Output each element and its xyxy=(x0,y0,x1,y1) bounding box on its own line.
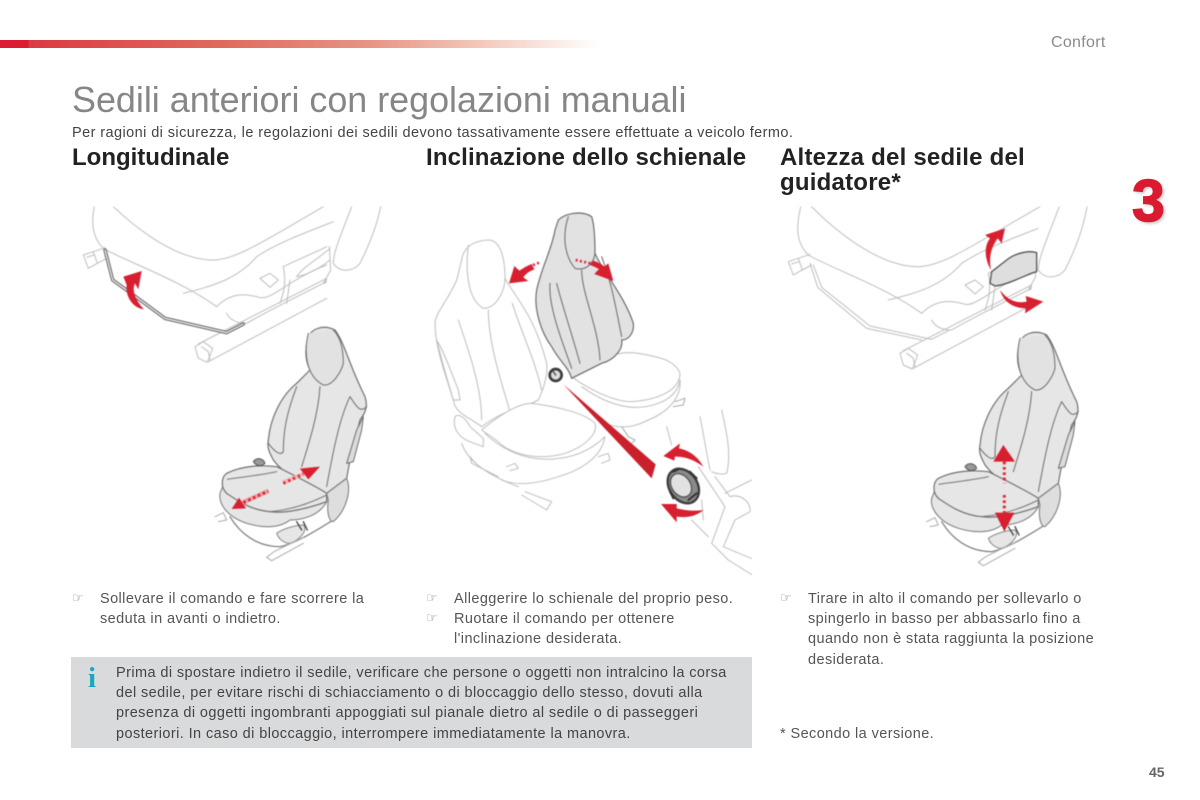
red zoom beam xyxy=(563,384,656,478)
arrow: rotate up xyxy=(663,443,703,467)
heading: Altezza del sedile del guidatore: Altezza del sedile del xyxy=(780,144,1025,171)
panel: longitudinale illustrations xyxy=(83,190,383,561)
height lever xyxy=(990,252,1037,286)
instruction text: Tirare in alto il comando per sollevarlo o xyxy=(808,591,1082,607)
small adjustment knob xyxy=(550,369,562,381)
seat with height arrows xyxy=(927,332,1078,566)
instruction column 3 xyxy=(780,591,1094,668)
instruction text: seduta in avanti o indietro. xyxy=(100,611,281,627)
instruction text 2 xyxy=(454,611,675,647)
heading: Inclinazione dello schienale: Inclinazione dello schienale xyxy=(426,144,746,171)
heading: Longitudinale: Longitudinale xyxy=(72,144,229,171)
instruction text: quando non è stata raggiunta la posizione xyxy=(808,631,1094,647)
rail detail xyxy=(788,197,1088,369)
chapter number: 3 xyxy=(1132,168,1165,234)
arrow: recline forward xyxy=(509,262,540,283)
instruction text: desiderata. xyxy=(808,652,884,668)
callout text: posteriori. In caso di bloccaggio, interrompere immediatamente la manovra. xyxy=(116,726,631,742)
seat with longitudinal arrows xyxy=(215,327,367,561)
title: Sedili anteriori con regolazioni manuali xyxy=(72,80,686,120)
instruction text 1: Alleggerire lo schienale del proprio peso. xyxy=(454,591,733,607)
knob detail xyxy=(661,410,755,577)
instruction text 2: l'inclinazione desiderata. xyxy=(454,631,622,647)
instruction text: Sollevare il comando e fare scorrere la xyxy=(100,591,364,607)
callout text: presenza di oggetti ingombranti appoggiati sul pianale dietro al sedile o di passeggeri xyxy=(116,705,698,721)
front seat outline xyxy=(435,240,610,510)
rail detail with lever xyxy=(83,190,383,362)
arrow: recline backward xyxy=(576,260,613,281)
header gradient bar xyxy=(0,40,600,48)
instruction text xyxy=(100,591,364,627)
pointer bullet 1: ☞ xyxy=(426,591,438,606)
rear seat with highlighted backrest xyxy=(536,213,685,443)
pointer bullet: ☞ xyxy=(780,591,792,606)
panel: inclinazione illustrations xyxy=(435,213,755,577)
heading: Altezza del sedile del guidatore: guidatore* xyxy=(780,169,901,196)
instruction column 1 xyxy=(72,591,364,627)
instruction text: spingerlo in basso per abbassarlo fino a xyxy=(808,611,1081,627)
panel: altezza illustrations xyxy=(788,197,1088,566)
pointer bullet 2: ☞ xyxy=(426,611,438,626)
callout text xyxy=(116,665,727,742)
instruction column 2 xyxy=(426,591,733,647)
section label: Confort: Confort xyxy=(1051,34,1106,51)
arrow: pull lever up xyxy=(985,228,1005,270)
page number: 45 xyxy=(1149,764,1165,780)
illustrations xyxy=(82,206,1088,576)
icon: info: i xyxy=(88,662,96,694)
callout text: Prima di spostare indietro il sedile, verificare che persone o oggetti non intralcino la corsa xyxy=(116,665,727,681)
pointer bullet: ☞ xyxy=(72,591,84,606)
arrow: lift lever xyxy=(123,271,144,309)
callout: info box xyxy=(71,657,752,748)
arrow: rotate down xyxy=(661,504,703,522)
arrow: push lever down xyxy=(1000,290,1043,313)
subtitle: Per ragioni di sicurezza, le regolazioni dei sedili devono tassativamente essere effettuate a veicolo fermo. xyxy=(72,125,793,141)
callout text: del sedile, per evitare rischi di schiacciamento o di bloccaggio dello stesso, dovuti alla xyxy=(116,685,703,701)
footnote: * Secondo la versione. xyxy=(780,726,934,742)
instruction text 2: Ruotare il comando per ottenere xyxy=(454,611,675,627)
heading: Altezza del sedile del guidatore xyxy=(780,144,1025,196)
instruction text xyxy=(808,591,1094,668)
